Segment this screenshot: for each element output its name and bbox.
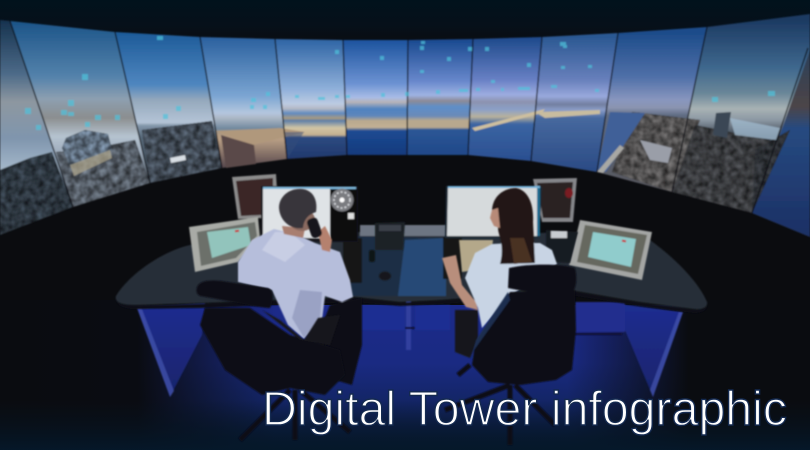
right main monitor [445,186,542,238]
woman's shirt [465,243,557,328]
woman's hair [492,188,535,264]
left chair headrest [196,281,273,308]
left main monitor [261,186,358,242]
city highlights [70,150,186,176]
woman's legs [455,310,478,358]
right chair base [445,365,555,445]
telephone handset [306,217,323,239]
city at lower left of wall [0,121,222,235]
floor with blue light [0,300,810,450]
aircraft data tags [25,36,775,130]
control desk [116,225,707,313]
right operator chair [445,265,576,445]
airport and river on centre wall panels [215,109,600,168]
woman's face [490,208,500,228]
man's face [289,209,315,231]
man's trousers [312,298,362,385]
left operator chair [196,281,350,440]
back monitors and touch terminals [189,174,652,280]
man's head [279,189,316,228]
man's neck and hand [282,226,305,238]
river wedge and dock buildings [597,112,780,173]
left chair back and seat [200,308,345,395]
seams between screen panels [10,21,808,213]
left touchscreen terminal [189,217,260,272]
desk phones and mouse [369,222,578,280]
man on the phone [238,189,362,385]
right chair headrest [508,265,576,293]
left red panel [232,174,277,219]
title: Digital Tower infographic [262,383,787,436]
right touchscreen terminal [569,220,652,280]
man's shirt [238,229,353,339]
dockside on right wall panels [612,112,790,213]
curved video wall [0,14,810,237]
right chair back [472,290,576,385]
left chair base [240,390,350,440]
right red panel [533,178,577,222]
woman at the desk [442,188,557,358]
woman's arm [442,255,478,310]
desk pedestals [137,300,683,397]
